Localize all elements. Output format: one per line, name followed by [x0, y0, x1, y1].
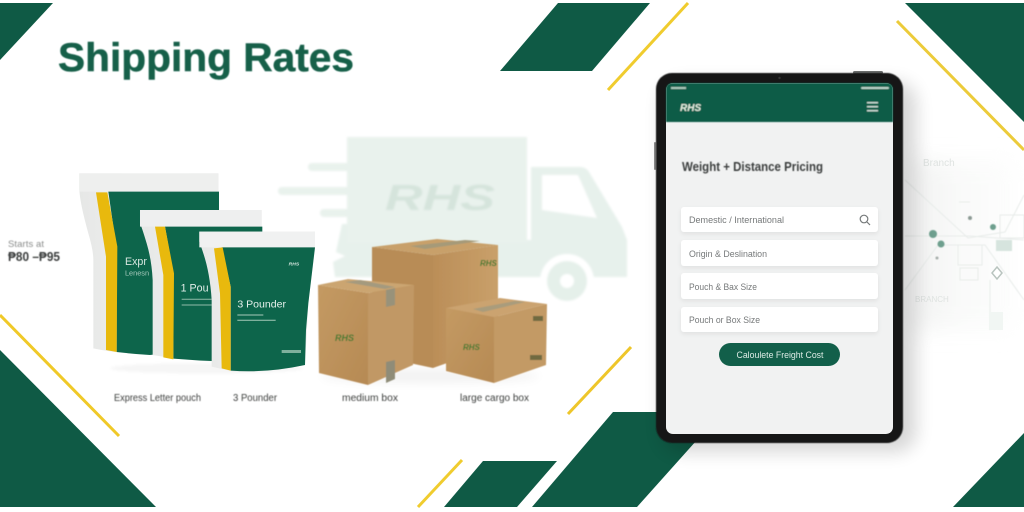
app header: [666, 83, 893, 122]
tablet frame: [656, 73, 903, 443]
corner shape: bottom parallelogram large: [532, 412, 722, 507]
map label: branch lower: BRANCH: [915, 295, 949, 304]
tall box logo: RHS: [480, 259, 498, 268]
wide box logo: RHS: [463, 343, 481, 352]
truck speed lines: [278, 163, 377, 217]
corner shape: top left triangle: [0, 3, 53, 60]
map pins: [929, 216, 1012, 260]
field: domestic or international: [681, 207, 878, 232]
product: pouches: [79, 173, 315, 374]
corner shape: bottom right triangle: [953, 433, 1024, 507]
field: pouch or box size: [681, 307, 878, 332]
price range: ₱80 –₱95: [8, 250, 60, 264]
map block: [989, 312, 1003, 330]
truck cab window: [542, 175, 597, 218]
status bar right: [861, 87, 889, 89]
boxes shadow: [320, 369, 540, 383]
corner shape: bottom parallelogram small: [444, 461, 557, 507]
pouch: 1 pounder: [140, 210, 262, 362]
form heading: Weight + Distance Pricing: [682, 160, 823, 174]
hamburger menu icon: [867, 102, 878, 111]
price caption: Starts at: [8, 239, 44, 250]
field: pouch and box size: [681, 273, 878, 299]
title: Shipping Rates: [58, 36, 354, 80]
field: pouch and box size: Pouch & Bax Size: [689, 282, 757, 292]
box: tall: [372, 239, 498, 368]
corner shape: top right triangle: [905, 3, 1024, 122]
pouch 3 fine print: [237, 314, 301, 353]
medium box logo: RHS: [335, 333, 354, 343]
corner shape: top centre parallelogram: [500, 3, 650, 71]
pouch 3 logo: RHS: [289, 262, 300, 268]
map diamond marker: [992, 267, 1002, 279]
accent line: top right yellow: [897, 21, 1024, 150]
product: cardboard boxes: [318, 239, 547, 385]
button: calculate freight cost: Caloulete Freight Cost: [736, 350, 824, 361]
field: domestic or international: Demestic / International: [689, 215, 784, 225]
field: origin and destination: [681, 240, 878, 266]
tablet screen: [666, 83, 893, 434]
watermark: delivery truck: [278, 137, 627, 308]
tablet side button: [654, 142, 656, 170]
wide box marks: [530, 316, 543, 360]
accent line: top centre yellow: [608, 3, 688, 90]
accent line: middle yellow: [568, 347, 631, 414]
pouch 2 fine print: [182, 299, 212, 306]
field: origin and destination: Origin & Deslination: [689, 249, 767, 259]
app logo: RHS: [680, 103, 701, 114]
truck chassis: [333, 167, 627, 277]
watermark: branch map: [905, 158, 1024, 330]
icon: search: [860, 215, 870, 225]
truck body: [347, 137, 527, 243]
field: pouch or box size: Pouch or Box Size: [689, 315, 760, 325]
tablet mockup: [654, 71, 916, 452]
label: 3 pounder: 3 Pounder: [233, 393, 278, 404]
truck logo text: RHS: [385, 177, 495, 218]
pouch 3 label: 3 Pounder: [237, 300, 287, 311]
corner shape: bottom left triangle: [0, 350, 156, 507]
label: medium box: medium box: [342, 393, 398, 404]
pouch shadow: [110, 363, 303, 374]
pouch 1 sublabel: Lenesn: [125, 269, 149, 278]
pouch 2 label: 1 Pou: [181, 282, 209, 294]
label: express letter pouch: Express Letter pouch: [114, 393, 201, 404]
tablet camera: [778, 77, 781, 79]
status bar left: [671, 87, 686, 89]
pouch: express letter: [79, 173, 219, 357]
pouch 1 label: Expr: [125, 256, 147, 268]
truck wheel: [540, 254, 594, 308]
tablet shadow: [662, 82, 916, 452]
price note: [8, 239, 60, 264]
label: large cargo box: large cargo box: [460, 393, 529, 404]
accent line: bottom yellow: [418, 460, 462, 507]
box: wide: [446, 298, 547, 383]
button: calculate freight cost: [719, 343, 840, 366]
box: medium: [318, 279, 414, 385]
map label: branch: Branch: [923, 158, 955, 169]
accent line: bottom left yellow: [0, 315, 119, 436]
pouch: 3 pounder: [199, 232, 315, 372]
product labels: [114, 393, 529, 404]
map roads: [905, 180, 1024, 330]
tablet power button: [853, 71, 883, 74]
